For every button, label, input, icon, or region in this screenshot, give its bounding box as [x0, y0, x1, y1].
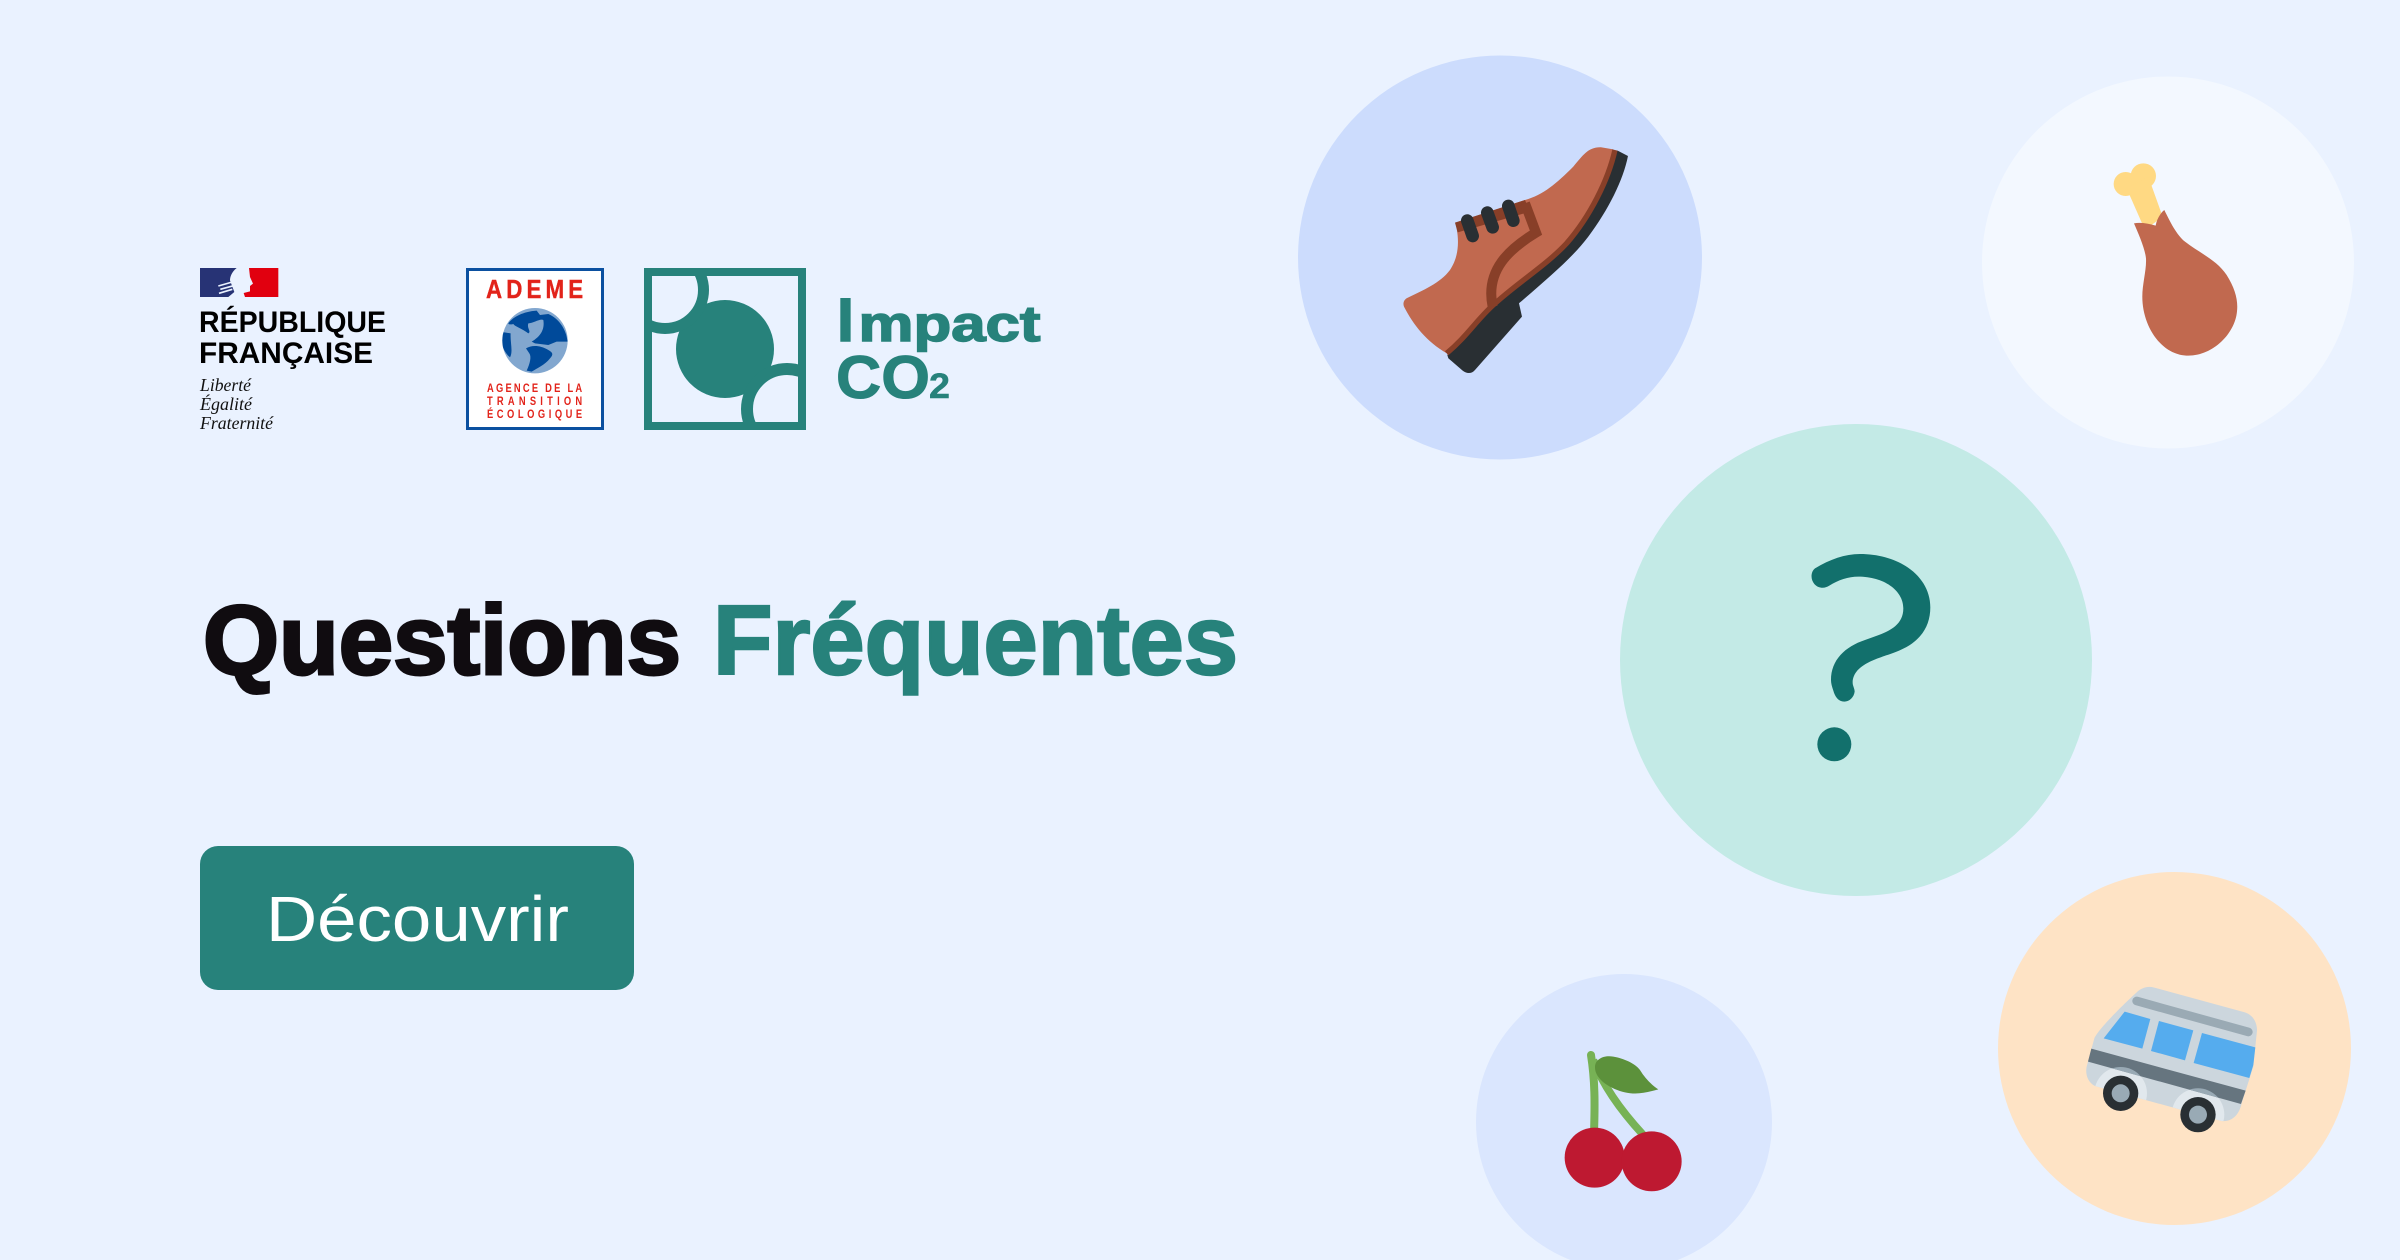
logo: ADEME: ADEME — [486, 275, 583, 304]
icon: question mark — [1812, 554, 1930, 761]
icon: shoe — [1403, 147, 1628, 373]
motto: Égalité — [199, 393, 253, 414]
logo: ADEME: TRANSITION — [487, 395, 582, 408]
icon: chicken leg — [2114, 163, 2237, 356]
logo: Impact CO2 mark — [644, 268, 806, 430]
motto: Fraternité — [199, 413, 274, 433]
logo: Impact CO2 wordmark: CO — [836, 344, 930, 411]
motto — [199, 375, 274, 433]
logo: Impact CO2 wordmark: mpact — [858, 296, 1041, 352]
wordmark: République Française: RÉPUBLIQUE — [199, 305, 386, 339]
title: Fréquentes — [713, 585, 1238, 695]
wordmark: République Française — [199, 305, 386, 370]
logo: Impact CO2 wordmark: 2 — [929, 367, 950, 406]
panel: chicken bubble — [1982, 76, 2354, 448]
panel: bus bubble — [1998, 872, 2351, 1225]
panel: cherry bubble — [1476, 974, 1772, 1260]
logo: République Française — [199, 268, 386, 433]
logo: ADEME: AGENCE DE LA — [487, 382, 582, 395]
logo: Impact CO2 wordmark: I — [837, 286, 854, 354]
button: Découvrir: Découvrir — [266, 883, 569, 955]
logo: Impact CO2 wordmark — [836, 286, 1041, 411]
motto: Liberté — [199, 375, 252, 395]
button: Découvrir — [200, 846, 634, 990]
wordmark: République Française: FRANÇAISE — [199, 337, 373, 370]
title: Questions — [203, 585, 681, 695]
title — [203, 585, 1238, 695]
panel: shoe bubble — [1298, 56, 1702, 460]
icon: cherries — [1565, 1055, 1682, 1191]
icon: bus — [2086, 987, 2257, 1141]
logo: ADEME — [468, 270, 602, 428]
logo: ADEME: ÉCOLOGIQUE — [487, 407, 582, 421]
panel: question bubble — [1620, 424, 2092, 896]
icon: globe — [500, 308, 568, 373]
icon: Marianne flag — [200, 268, 278, 297]
